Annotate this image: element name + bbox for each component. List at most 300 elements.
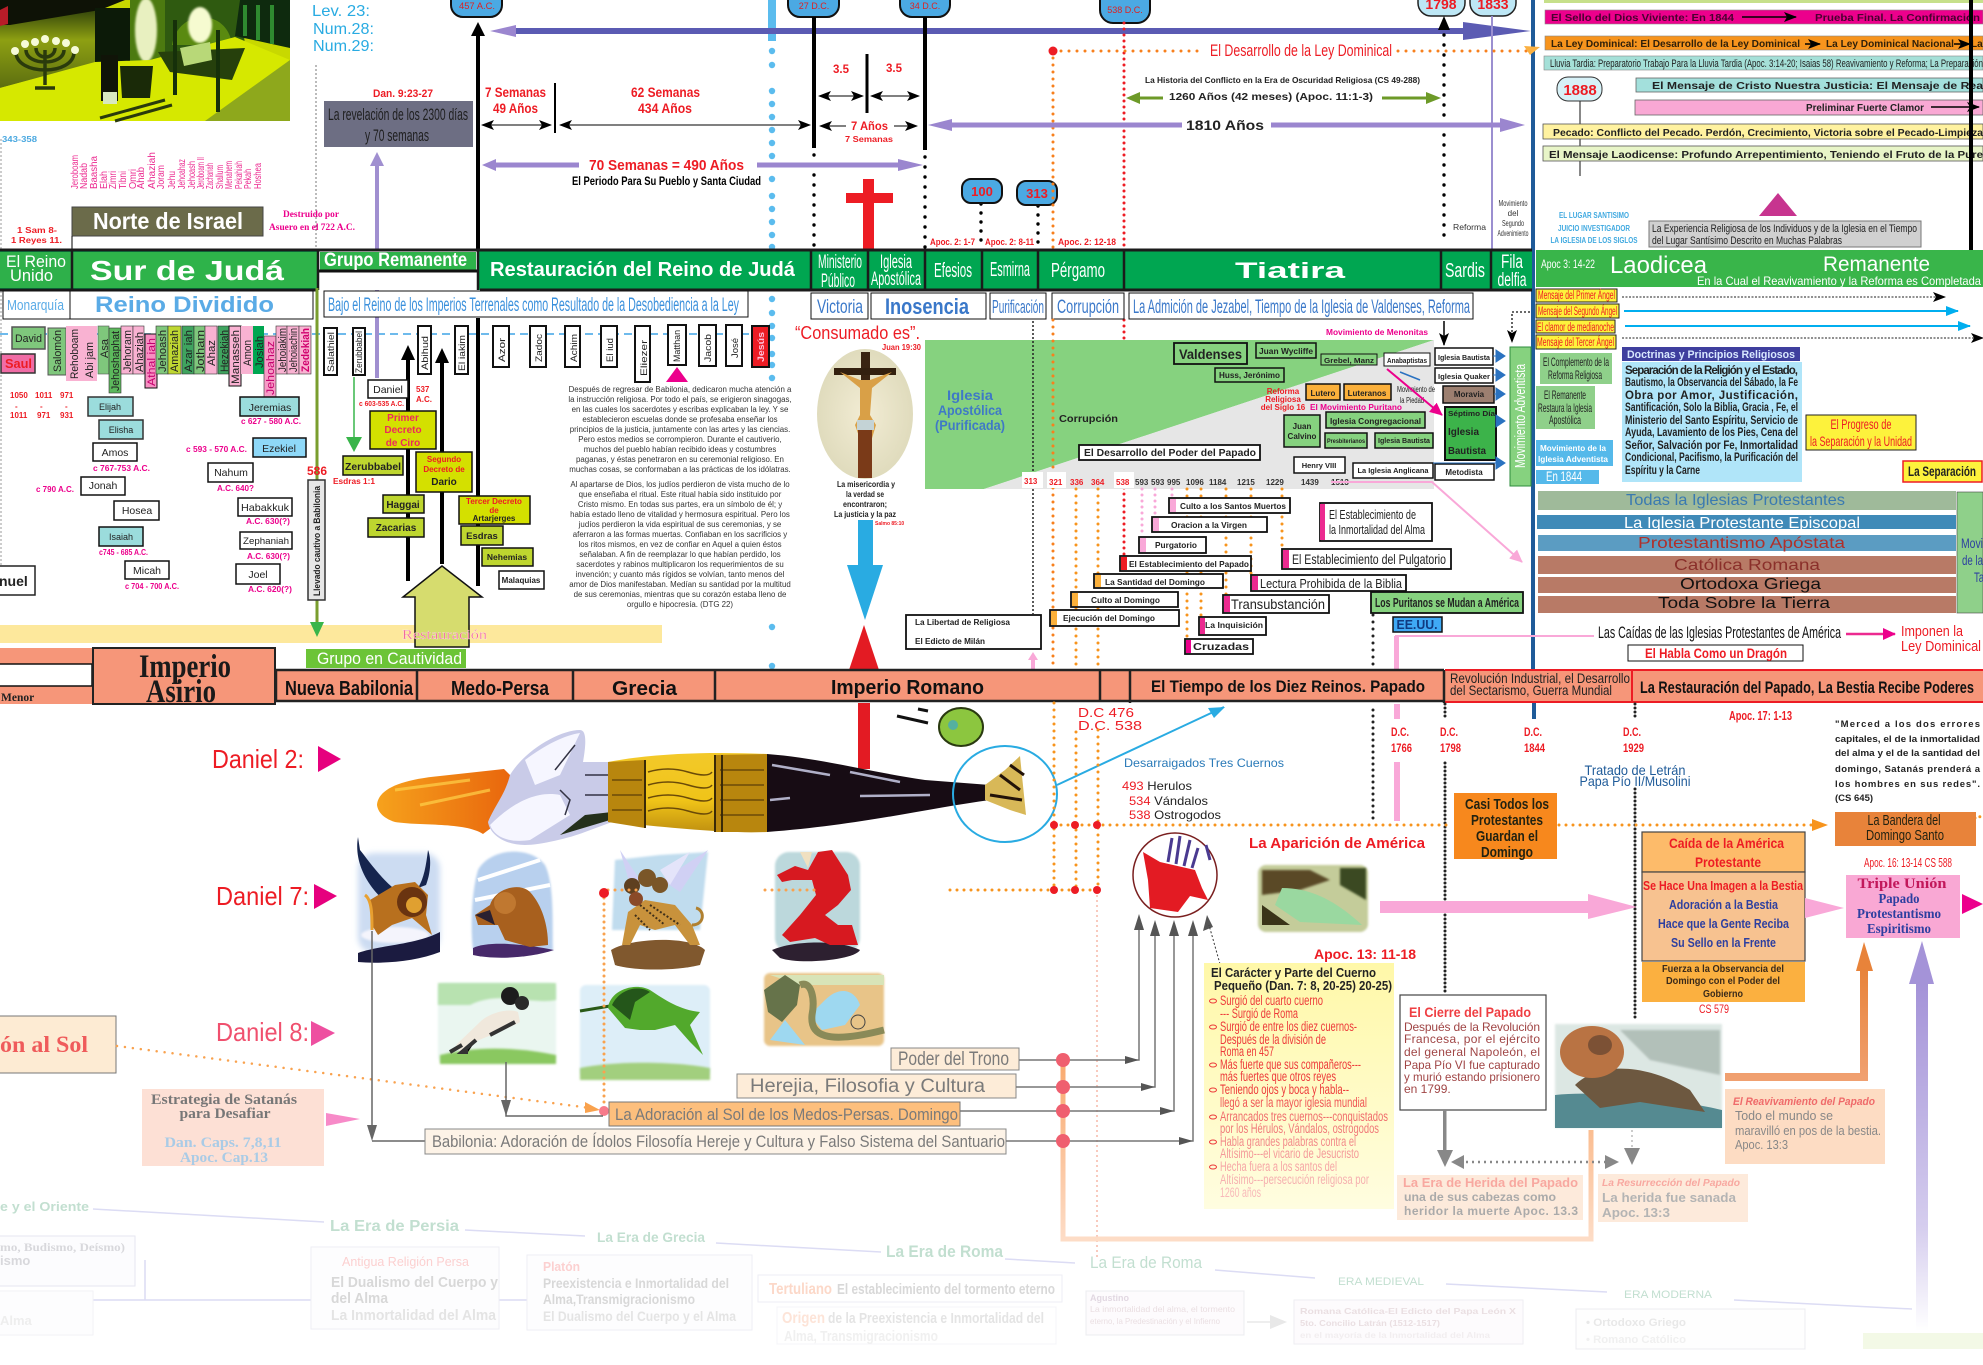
Esdras: Esdras: [466, 531, 498, 542]
falls of protestant churches: Las Caídas de las Iglesias Protestantes de América: [1598, 623, 1841, 642]
era titles: ERA MODERNA: [1624, 1289, 1713, 1301]
Libertad de Religiosa / Edicto de Milán: El Edicto de Milán: [915, 637, 985, 646]
La Bandera del Domingo Santo: Domingo Santo: [1866, 827, 1944, 844]
Metodista: Metodista: [1445, 468, 1483, 477]
70 weeks = 490 years: [482, 157, 923, 188]
Isaiah: Isaiah: [109, 532, 133, 542]
Nehemias: [482, 548, 533, 566]
era connectors: [93, 1209, 1912, 1309]
Southern kings: Rehoboam: [69, 329, 81, 379]
70 weeks = 490 years: 70 Semanas = 490 Años: [589, 157, 744, 174]
Elijah: [88, 397, 133, 416]
Jonah: c 790 A.C.: [36, 485, 74, 494]
Los Puritanos: [1371, 592, 1523, 613]
paragraph: after returning from Babylon: principios de la justicia, juntamente con las artes y las ciencias.: [570, 425, 790, 434]
Monarquía / Reino Dividido: Reino Dividido: [95, 292, 274, 317]
years row: 1096: [1186, 478, 1204, 487]
Elisha: [99, 420, 143, 439]
Revolución Industrial: del Sectarismo, Guerra Mundial: [1450, 682, 1612, 698]
Era of the papacy's wound: una de sus cabezas como: [1404, 1190, 1556, 1204]
ancestors of Jesus: Achim: [569, 334, 580, 362]
orange arrow to Triple Union: [1725, 942, 1873, 1077]
Zerubbabel: Zerubbabel: [345, 461, 401, 473]
Zerubbabel: Esdras 1:1: [333, 477, 376, 486]
Reavivamiento box: El Reavivamiento del Papado: [1733, 1096, 1875, 1108]
icon: bear: [472, 852, 554, 958]
little horn characteristics: Después de la división de: [1220, 1032, 1326, 1047]
Apocalypse references: [930, 237, 1116, 248]
three uprooted horns: 534 Vándalos: [1129, 794, 1208, 808]
era titles: ERA MEDIEVAL: [1338, 1276, 1424, 1288]
Era of the papacy's wound: La Era de Herida del Papado: [1403, 1175, 1578, 1190]
box: Plato: El Dualismo del Cuerpo y el Alma: [543, 1308, 736, 1324]
La Bandera del Domingo Santo: La Bandera del: [1868, 812, 1940, 829]
era titles: La Era de Grecia: [597, 1229, 705, 1245]
La Iglesia Anglicana: [1353, 463, 1433, 478]
paragraph: after returning from Babylon: la instrucción religiosa. Por todo el país, se erigieron sinagogas,: [568, 395, 792, 404]
box: Origen: Alma, Transmigracionismo: [784, 1328, 938, 1345]
Fall of protestant America panel: Su Sello en la Frente: [1671, 935, 1776, 950]
little horn characteristics: 1260 años: [1220, 1185, 1261, 1200]
537 A.C.: A.C.: [416, 395, 432, 404]
Purificación: [990, 293, 1046, 319]
era titles: e y el Oriente: [0, 1199, 89, 1214]
captivity line and 586: Llevado cautivo a Babilonia: [312, 485, 322, 596]
Amos: Amos: [102, 447, 128, 459]
dates below empire bar: [1373, 704, 1792, 1021]
Casi Todos los Protestantes: [1454, 793, 1557, 861]
Resurrection of the papacy: [1598, 1174, 1748, 1222]
captivity line and 586: 586: [307, 464, 327, 478]
Southern kings: Jehoash: [157, 330, 169, 372]
Valdenses: Valdenses: [1179, 346, 1242, 362]
Lateran treaty: Tratado de Letrán: [1584, 762, 1686, 778]
Juan Calvino: Juan: [1293, 422, 1311, 431]
three uprooted horns: Desarraigados Tres Cuernos: [1124, 756, 1284, 770]
paragraph: after returning from Babylon: muchos del pueblo habían recibido ideas y costumbres: [584, 445, 776, 454]
date pills: 100 and 313: 313: [1026, 186, 1048, 201]
pink pointer to Triple Union: [1805, 898, 1844, 918]
church segments: Efesios: [934, 260, 972, 282]
Daniel 7 label: Daniel 7:: [216, 881, 309, 911]
537 A.C.: 537: [416, 385, 430, 394]
dates below empire bar: 1766: [1391, 741, 1412, 755]
chronology arrows: [482, 54, 919, 133]
church segments: Iglesia: [880, 252, 912, 273]
Grecia: Grecia: [612, 678, 678, 700]
Southern kings: Manasseh: [230, 330, 242, 384]
connector from power boxes to little horn: [960, 914, 1591, 1239]
empires bar: [0, 648, 1983, 710]
Revolución Industrial: [1450, 670, 1630, 698]
doctrines panel: Espíritu y la Carne: [1625, 465, 1700, 477]
icon: dragon little horn: [1133, 833, 1217, 917]
Imperio Asirio: Asirio: [146, 674, 216, 710]
Babilonia: [425, 1129, 1006, 1154]
Isaiah: c745 - 685 A.C.: [99, 548, 148, 557]
paragraph: after returning from Babylon: sacerdotes y rabinos multiplicaron los requerimientos de su: [576, 560, 784, 569]
chronology: 3.5 + 3.5 = 7 years: 3.5: [833, 64, 850, 76]
reign dates: 1011: [35, 391, 53, 400]
grey arrowheads: [367, 1100, 511, 1141]
Séptimo Día Iglesia Bautista: Iglesia: [1448, 427, 1479, 438]
banner: preliminary loud cry: Preliminar Fuerte Clamor: [1806, 103, 1924, 114]
Triple Unión: Papado: [1878, 892, 1920, 907]
El Reino Unido: El Reino: [6, 252, 66, 271]
banner: seal of the living God: [1545, 10, 1983, 24]
Iglesia Bautista (Puritan): [1375, 433, 1433, 448]
three uprooted horns: 493 Herulos: [1122, 779, 1192, 793]
Micah: Micah: [133, 565, 161, 577]
box: Roman Catholic: 5to. Concilio Latrán (1512-1517): [1300, 1318, 1440, 1328]
bar: Todas las Iglesias Protestantes: Todas la Iglesias Protestantes: [1626, 492, 1845, 509]
blue arrow down: [847, 520, 883, 620]
Northern kings list: Jehu: [167, 171, 178, 189]
Southern kings: Josiah: [254, 336, 266, 368]
Sur de Judá: Sur de Judá: [90, 255, 285, 286]
three angels messages: [1536, 289, 1619, 349]
David: [12, 327, 45, 349]
ancestors of Jesus: [324, 325, 769, 382]
reign dates: [10, 391, 74, 420]
Northern kings list: Hoshea: [253, 163, 264, 189]
statue of Daniel 2: [377, 730, 1026, 845]
grey box: experience: [1649, 221, 1921, 247]
chronology: 7 weeks and 62 weeks: 434 Años: [638, 100, 692, 116]
box: Origen: Origen: [782, 1310, 825, 1327]
caption: revelation of 2300 days: y 70 semanas: [365, 126, 429, 145]
Southern kings: [1, 326, 312, 397]
doctrines panel: Obra por Amor, Justificación,: [1625, 390, 1798, 402]
caption: revelation of 2300 days: [324, 88, 473, 147]
red shaft: [858, 703, 870, 769]
Northern kings list: Jehoahaz: [177, 159, 188, 189]
sun worship box (cropped): [0, 1016, 116, 1073]
Lateran treaty: Papa Pío II/Musolini: [1580, 773, 1690, 789]
Most Holy Place caption: EL LUGAR SANTISIMO: [1559, 211, 1629, 220]
Tercer Decreto de Artarjerges: [459, 496, 530, 524]
Satan's strategy: Apoc. Cap.13: [180, 1150, 268, 1166]
three uprooted horns: 538 Ostrogodos: [1129, 808, 1221, 822]
Casi Todos los Protestantes: Domingo: [1481, 844, 1533, 861]
Culto a los Santos Muertos: Culto a los Santos Muertos: [1180, 501, 1286, 511]
icon: dragon over map: [764, 973, 884, 1046]
Joel: [236, 564, 292, 594]
Northern kings list: Zimri: [108, 171, 119, 189]
Resurrection of the papacy: Apoc. 13:3: [1602, 1205, 1670, 1220]
Southern kings: Jehoahaz: [265, 341, 277, 395]
church segments: Apostólica: [871, 269, 921, 290]
little horn characteristics: Altísimo---persecución religiosa por: [1220, 1172, 1369, 1187]
Reforma and second advent movement labels: del: [1508, 209, 1519, 218]
Under earthly empires: [324, 291, 748, 317]
doctrines panel: [1622, 347, 1802, 482]
dates below empire bar: D.C.: [1524, 725, 1542, 739]
paragraph: after returning from Babylon: establecieron escuelas donde se profesaba enseñar los: [582, 415, 778, 424]
Reavivamiento box: Apoc. 13:3: [1735, 1138, 1788, 1152]
icon: leopard beast: [1555, 1024, 1722, 1128]
years row: 538: [1116, 478, 1130, 487]
Segundo Decreto de Dario: [416, 452, 472, 492]
three uprooted horns: [1122, 756, 1284, 822]
Ezekiel: [186, 438, 306, 457]
box: Roman Catholic: [1294, 1300, 1523, 1344]
box: Origen: de la Preexistencia e Inmortalidad del: [828, 1310, 1044, 1327]
yellow band: [0, 625, 662, 643]
Northern kings list: Pekah: [243, 169, 254, 189]
date pill: 1888: [1557, 77, 1602, 176]
quote: two great errors: capitales, el de la inmortalidad: [1835, 734, 1980, 745]
Nahum: Nahum: [214, 467, 248, 479]
arrows to Adventist movement: [1331, 312, 1530, 562]
David: David: [15, 333, 42, 345]
Inmortalidad del Alma: la Inmortalidad del Alma: [1329, 522, 1426, 537]
box: ancient Persian religion: El Dualismo del Cuerpo y: [331, 1274, 499, 1291]
ancestors of Jesus: El iud: [605, 338, 616, 362]
Iglesia Congregacional: [1326, 412, 1425, 428]
dates below empire bar: 1798: [1440, 741, 1461, 755]
Resurrection of the papacy: La herida fue sanada: [1602, 1190, 1737, 1205]
bar borders: [276, 670, 1444, 703]
quote: two great errors: "Merced a los dos errores: [1835, 719, 1980, 730]
quote: two great errors: (CS 645): [1835, 793, 1873, 804]
Imperio Asirio: [93, 648, 275, 710]
bar: Católica Romana: [1538, 556, 1956, 574]
Fall of protestant America panel: Hace que la Gente Reciba: [1658, 916, 1790, 931]
box: Plato: Preexistencia e Inmortalidad del: [543, 1275, 729, 1291]
pink arrow up to Roman empire bar: [1028, 652, 1038, 669]
reference: Lev. 23, Num. 28, 29: Num.28:: [313, 21, 374, 38]
chronology: 7 weeks and 62 weeks: [485, 84, 700, 116]
Nueva Babilonia: Nueva Babilonia: [285, 678, 414, 700]
Fall of protestant America panel: Domingo con el Poder del: [1666, 975, 1780, 987]
quote: two great errors: [1835, 719, 1981, 804]
Northern kings list: Shallum: [215, 165, 226, 189]
box: modern religions: • Ortodoxo Griego: [1586, 1317, 1686, 1329]
box: Augustine: [1086, 1291, 1244, 1335]
Zephaniah: A.C. 630(?): [247, 552, 290, 561]
angels arrows: [1622, 297, 1983, 338]
Primer Decreto de Ciro: Decreto: [384, 425, 422, 436]
Zephaniah: [240, 532, 292, 561]
church segments: Público: [821, 271, 855, 292]
Micah: c 704 - 700 A.C.: [125, 582, 179, 591]
Los Puritanos: Los Puritanos se Mudan a América: [1375, 595, 1520, 610]
Habakkuk: [238, 498, 292, 526]
banner: seal of the living God: Prueba Final. La Confirmación: [1815, 13, 1980, 24]
black arrow into Remnant: [1964, 0, 1978, 278]
churches band: [0, 250, 1532, 292]
Juan Wycliffe: [1256, 343, 1316, 358]
Consumado es and crucifix: Juan 19:30: [882, 343, 922, 352]
purple arrow to Triple Union: [1909, 941, 1934, 1331]
Joel: Joel: [248, 569, 268, 581]
green panels: complement of the reform: [1536, 353, 1613, 484]
bar: Iglesia Protestante Episcopal: [1537, 515, 1956, 532]
Southern kings: Abi jam: [84, 342, 96, 378]
little horn characteristics: Habla grandes palabras contra el: [1220, 1134, 1356, 1149]
reign dates: 971: [37, 411, 51, 420]
doctrines panel: Ministerio del Santo Espíritu, Servicio de: [1625, 415, 1798, 427]
era titles: [0, 1199, 1713, 1301]
Menonitas: Movimiento de Menonitas: [1326, 328, 1429, 337]
Iglesia Bautista: [1435, 348, 1493, 365]
box: Origen: [777, 1307, 1056, 1345]
years row: 1215: [1237, 478, 1255, 487]
box: Roman Catholic: Romana Católica-El Edicto del Papa León X: [1300, 1306, 1516, 1316]
Northern kings list: Tibni: [118, 171, 129, 189]
green panels: complement of the reform: Restaura la Iglesia: [1538, 401, 1592, 415]
box: Plato: Platón: [543, 1259, 580, 1274]
reference: 343-358: 343-358: [2, 135, 38, 144]
icon: stone: [897, 708, 983, 746]
paragraph: after returning from Babylon: amor de Dios manifestaban. Medían su santidad por la multitud: [569, 580, 791, 589]
Northern kings list: Ahaziah: [147, 152, 158, 189]
subtitle row: [3, 291, 1473, 319]
Lutero: [1306, 384, 1340, 400]
reference: Lev. 23, Num. 28, 29: Num.29:: [313, 38, 374, 55]
main 2300 days arrow: [490, 22, 1531, 40]
date pill: 27 D.C.: [788, 0, 839, 248]
Asia Menor: Menor: [1, 692, 34, 704]
doctrines panel: Ayuda, Lavamiento de los Pies, Cena del: [1625, 427, 1798, 439]
little horn characteristics: El Carácter y Parte del Cuerno: [1211, 966, 1376, 980]
Corrupción: [1052, 293, 1124, 319]
Reavivamiento box: Todo el mundo se: [1735, 1109, 1833, 1123]
Fall of protestant America panel: Gobierno: [1703, 988, 1743, 1000]
Southern kings: Hezekiah: [219, 330, 231, 372]
box: ancient Persian religion: del Alma: [331, 1290, 389, 1307]
Imperio Romano: Imperio Romano: [831, 677, 984, 699]
quote: two great errors: del alma y el de la santidad del: [1835, 748, 1980, 759]
date pill: 34 D.C.: 34 D.C.: [910, 1, 940, 11]
bar: Protestantismo Apóstata: [1538, 535, 1956, 552]
destroyed by Assyria: Asuero en el 722 A.C.: [269, 223, 355, 233]
grey box: experience: del Lugar Santísimo Descrito en Muchas Palabras: [1652, 235, 1842, 247]
Restauración del Reino de Judá: Restauración del Reino de Judá: [490, 259, 796, 281]
Samuel (cropped): [0, 566, 35, 595]
Elijah: Elijah: [99, 402, 121, 412]
reform movements: [1079, 328, 1496, 480]
paragraph: after returning from Babylon: los ritos mismos, en vez de confiar en Aquel a quien éstos: [578, 540, 782, 549]
Apocalypse references: Apoc. 2: 8-11: [985, 237, 1035, 248]
Laodicea band: Laodicea: [1610, 252, 1708, 279]
Malaquias: [499, 571, 544, 589]
Joel: A.C. 620(?): [248, 585, 292, 594]
Northern kings list: Jehoash: [187, 161, 198, 189]
reign dates: 1011: [10, 411, 28, 420]
Consumado es and crucifix: La misericordia y: [837, 479, 895, 489]
Movimiento Adventista column: Movimiento Adventista: [1512, 364, 1529, 468]
La Inquisición: La Inquisición: [1205, 621, 1263, 630]
Triple Unión: Espiritismo: [1867, 922, 1931, 937]
box: modern religions: [1576, 1309, 1805, 1349]
green panels: complement of the reform: El Remanente: [1544, 388, 1586, 402]
Segundo Decreto de Dario: Decreto de: [423, 465, 465, 474]
progress of separation: El Progreso de: [1830, 416, 1892, 432]
Poder del Trono: Poder del Trono: [898, 1049, 1009, 1070]
little horn characteristics: por los Hérulos, Vándalos, ostrogodos: [1220, 1121, 1379, 1136]
Séptimo Día Iglesia Bautista: [1445, 407, 1496, 460]
Iglesia Bautista (Puritan): Iglesia Bautista: [1378, 438, 1430, 445]
Babilonia: Babilonia: Adoración de Ídolos Filosofía Hereje y Cultura y Falso Sistema del Santuario: [432, 1132, 1005, 1151]
Huss, Jerónimo: Huss, Jerónimo: [1219, 371, 1280, 380]
box: Tertullian: Tertuliano: [769, 1281, 832, 1298]
Daniel: Daniel: [373, 384, 403, 396]
Saul: [1, 354, 35, 373]
Zephaniah: Zephaniah: [243, 536, 289, 546]
Southern kings: Ahaz: [206, 340, 218, 366]
era titles: La Era de Roma: [1090, 1253, 1202, 1272]
box: eastern religions: mo, Budismo, Deísmo): [0, 1240, 125, 1254]
Esdras: [461, 526, 503, 545]
reign dates: -: [65, 402, 68, 411]
chronology: 7 weeks and 62 weeks: 62 Semanas: [631, 84, 700, 100]
La Bandera del Domingo Santo: [1835, 812, 1976, 846]
empire bar body: [276, 670, 1983, 701]
Habakkuk: A.C. 630(?): [246, 517, 290, 526]
chronology: 3.5 + 3.5 = 7 years: 7 Años: [851, 119, 888, 133]
icon: goat: [580, 985, 710, 1080]
little horn characteristics: [1204, 963, 1394, 1209]
paragraph: after returning from Babylon: orgullo e hipocresía. (DTG 22): [627, 600, 733, 609]
years row: 593: [1151, 478, 1165, 487]
three angels messages: Mensaje del Primer Ángel: [1538, 289, 1615, 302]
banner: preliminary loud cry: [1635, 100, 1983, 115]
Triple Unión: [1846, 875, 1960, 938]
little horn characteristics: Pequeño (Dan. 7: 8, 20-25) 20-25): [1214, 979, 1392, 993]
Grupo en Cautividad: Grupo en Cautividad: [317, 649, 462, 668]
reference: 1 Sam 8 - 1 Reyes 11: [11, 226, 62, 245]
Presbiterianos: [1325, 433, 1367, 448]
Hosea: [114, 501, 159, 520]
Southern kings: Jehoiachin: [288, 328, 300, 372]
Lutero: Lutero: [1311, 389, 1336, 398]
Ejecución del Domingo: [1050, 610, 1179, 626]
little horn characteristics: Teniendo ojos y boca y habla--: [1220, 1082, 1349, 1097]
paragraph: after returning from Babylon: señalaban. A fin de reemplazar lo que habían perdido, los: [579, 550, 781, 559]
years row: [1022, 472, 1349, 488]
Ezekiel: Ezekiel: [262, 443, 296, 455]
years row: 593: [1135, 478, 1149, 487]
box: Augustine: La inmortalidad del alma, el tormento: [1090, 1304, 1235, 1314]
Juan Wycliffe: Juan Wycliffe: [1259, 347, 1314, 356]
EE.UU.: EE.UU.: [1396, 617, 1438, 632]
quote: two great errors: los hombres en sus redes".: [1835, 779, 1980, 790]
dates below empire bar: D.C.: [1623, 725, 1641, 739]
faded eras timeline: [0, 1199, 1983, 1349]
D.C. 476 and 538: [1078, 706, 1142, 733]
green panels: complement of the reform: El Complemento de la: [1543, 355, 1609, 369]
banner: sin: Pecado: Conflicto del Pecado. Perdón, Crecimiento, Victoria sobre el Pecado-Limpieza: [1553, 127, 1983, 139]
Closing of the papacy: en 1799.: [1404, 1082, 1451, 1096]
three angels messages: El clamor de medianoche: [1537, 322, 1614, 334]
Southern kings: Azar iah: [183, 330, 195, 372]
Tercer Decreto de Artarjerges: Artarjerges: [473, 514, 516, 523]
Corrupción: Corrupción: [1057, 297, 1119, 318]
Elisha: Elisha: [109, 425, 133, 435]
Daniel: c 603-535 A.C.: [359, 399, 404, 408]
ancestors of Jesus: Azor: [497, 338, 508, 362]
little horn characteristics: --- Surgió de Roma: [1220, 1006, 1298, 1021]
timeline colored dotted lines: [1053, 320, 1282, 666]
green column: movement: [1957, 492, 1983, 613]
Northern kings list: Elah: [99, 171, 110, 189]
ancestors of Jesus: Zadoc: [534, 334, 545, 362]
chronology: 7 weeks and 62 weeks: 49 Años: [493, 100, 538, 116]
Libertad de Religiosa / Edicto de Milán: [906, 615, 1041, 649]
bar: Católica Romana: Católica Romana: [1674, 557, 1820, 574]
